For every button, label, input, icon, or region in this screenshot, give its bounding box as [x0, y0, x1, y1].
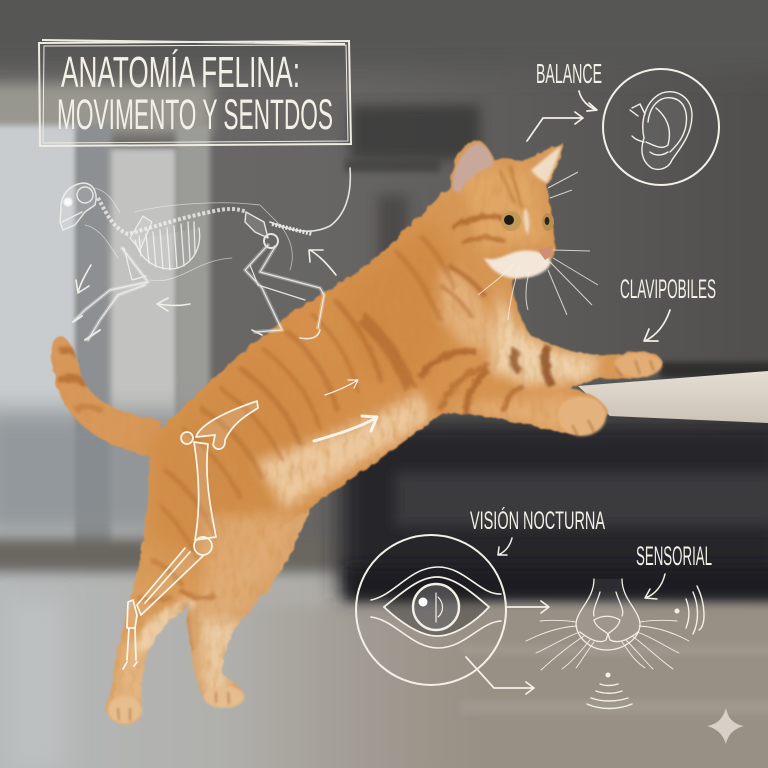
- label: night vision: VISIÓN NOCTURNA: [470, 506, 605, 535]
- arrows on left: [76, 250, 336, 311]
- arrows to ear: [527, 91, 597, 141]
- flank stripes: [58, 166, 552, 600]
- label: balance: BALANCE: [536, 58, 602, 89]
- sound waves bottom: [587, 675, 632, 708]
- right eye: [542, 213, 554, 231]
- cat nose and whiskers sketch: [526, 579, 689, 670]
- femur: [194, 442, 216, 540]
- skeleton illustration: [60, 168, 350, 340]
- right ear inner: [531, 146, 561, 183]
- arrows from eye: [466, 601, 549, 694]
- eye icon: [356, 535, 506, 685]
- colour patches and stripes: [56, 165, 604, 703]
- cat: [50, 139, 664, 726]
- hind paws: [108, 686, 244, 724]
- cat head details: [453, 143, 598, 320]
- ear icon circle: [603, 69, 719, 185]
- front legs: [73, 248, 148, 340]
- arrow to paw: [644, 310, 670, 341]
- sound waves right: [677, 586, 704, 634]
- thin arrow: [325, 380, 358, 395]
- table top: [578, 371, 768, 423]
- scapula: [130, 216, 152, 250]
- arrow to nose: [645, 574, 665, 599]
- hind leg bones overlay: [123, 401, 258, 669]
- front paws: [558, 353, 662, 436]
- body contour: [85, 188, 292, 281]
- arrow: hip: [309, 250, 336, 275]
- ear sketch: [630, 92, 692, 169]
- title line 2: MOVIMENTO Y SENTDOS: [57, 91, 333, 139]
- title box: [39, 40, 351, 146]
- muzzle: [484, 250, 551, 278]
- left ear inner: [453, 143, 493, 193]
- body motion arrows: [314, 380, 377, 441]
- arrow: front legs: [76, 265, 91, 293]
- cat body with fur: [50, 139, 664, 726]
- sparkle icon: [707, 708, 744, 744]
- spine: [98, 198, 246, 234]
- ribs: [135, 222, 200, 270]
- fur fibres: [111, 190, 591, 696]
- tibia: [137, 548, 203, 615]
- title line 1: ANATOMÍA FELINA:: [61, 48, 300, 97]
- skull: [60, 183, 96, 230]
- thick arrow: [314, 416, 377, 441]
- whiskers: [526, 620, 689, 670]
- pelvis and hind legs: [245, 212, 324, 339]
- left eye: [501, 211, 521, 231]
- eye sketch: [371, 567, 501, 648]
- tail: [270, 168, 350, 231]
- nose: [538, 246, 552, 260]
- ankle and foot: [123, 600, 137, 669]
- whiskers: [478, 172, 598, 320]
- white blaze: [524, 208, 529, 236]
- pelvis bone: [196, 401, 258, 449]
- arrow: backward motion: [157, 298, 190, 311]
- arrow to eye circle: [498, 538, 512, 555]
